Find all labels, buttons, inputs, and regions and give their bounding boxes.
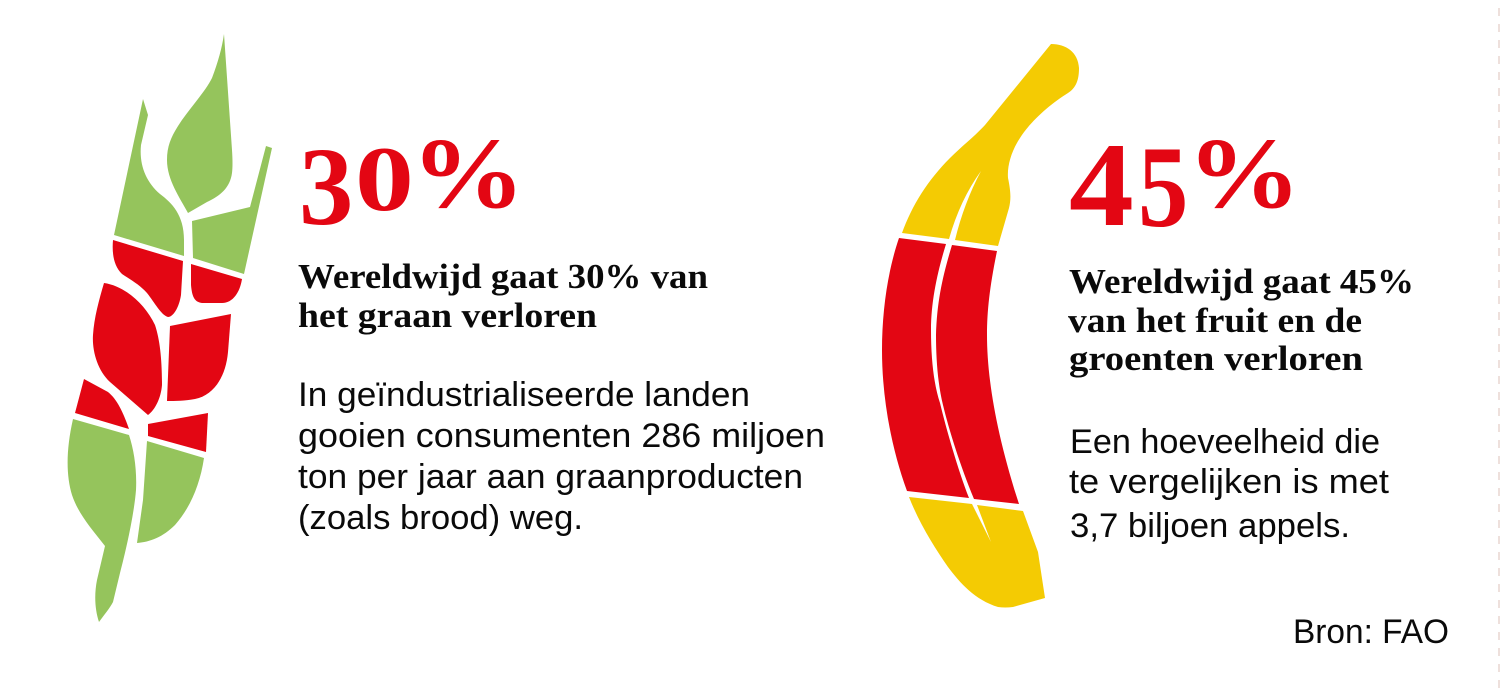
big number: 45%: 4 xyxy=(1069,119,1134,252)
banana top yellow xyxy=(902,44,1079,246)
heading: grain xyxy=(298,257,708,335)
icon: wheat ear xyxy=(68,34,272,622)
big number: 30%: 0 xyxy=(355,128,414,230)
wheat lower left leaf and stem xyxy=(68,419,136,622)
text block: grain: gooien consumenten 286 miljoen xyxy=(298,417,825,455)
text block: grain xyxy=(298,376,825,537)
wheat red segment 4 xyxy=(167,314,231,401)
text block: grain: ton per jaar aan graanproducten xyxy=(298,458,803,496)
text block: grain: (zoals brood) weg. xyxy=(298,499,583,537)
text block: fruit: Een hoeveelheid die xyxy=(1070,423,1380,461)
text block: grain: In geïndustrialiseerde landen xyxy=(298,376,750,414)
heading: fruit: Wereldwijd gaat 45% xyxy=(1069,262,1414,301)
heading: fruit xyxy=(1068,262,1414,378)
wheat upper right leaf xyxy=(192,146,272,274)
text block: fruit: te vergelijken is met xyxy=(1069,463,1390,501)
wheat red segment 1 xyxy=(113,240,183,317)
heading: fruit: groenten verloren xyxy=(1069,339,1363,378)
banana bottom yellow xyxy=(909,497,1045,608)
wheat red segment 6 xyxy=(148,413,208,452)
source: Bron: FAO xyxy=(1293,613,1449,651)
wheat red segment 5 xyxy=(75,379,129,429)
wheat lower right leaf xyxy=(137,441,204,543)
text block: fruit xyxy=(1069,423,1390,545)
big number: 30% xyxy=(299,118,525,248)
big number: 45%: 5 xyxy=(1138,122,1188,252)
big number: 45% xyxy=(1069,118,1301,252)
big number: 30%: 3 xyxy=(299,125,353,248)
big number: 30%: % xyxy=(411,118,525,229)
text block: fruit: 3,7 biljoen appels. xyxy=(1070,507,1350,545)
heading: grain: het graan verloren xyxy=(298,296,597,335)
icon: banana xyxy=(882,44,1079,608)
wheat red segment 2 xyxy=(191,264,242,303)
wheat top leaf xyxy=(167,34,232,213)
wheat upper left leaf xyxy=(114,99,184,256)
banana red right band xyxy=(936,245,1019,504)
banana red left band xyxy=(882,238,969,498)
heading: grain: Wereldwijd gaat 30% van xyxy=(298,257,708,296)
heading: fruit: van het fruit en de xyxy=(1068,301,1362,340)
big number: 45%: % xyxy=(1187,118,1301,229)
wheat red segment 3 xyxy=(93,283,162,415)
